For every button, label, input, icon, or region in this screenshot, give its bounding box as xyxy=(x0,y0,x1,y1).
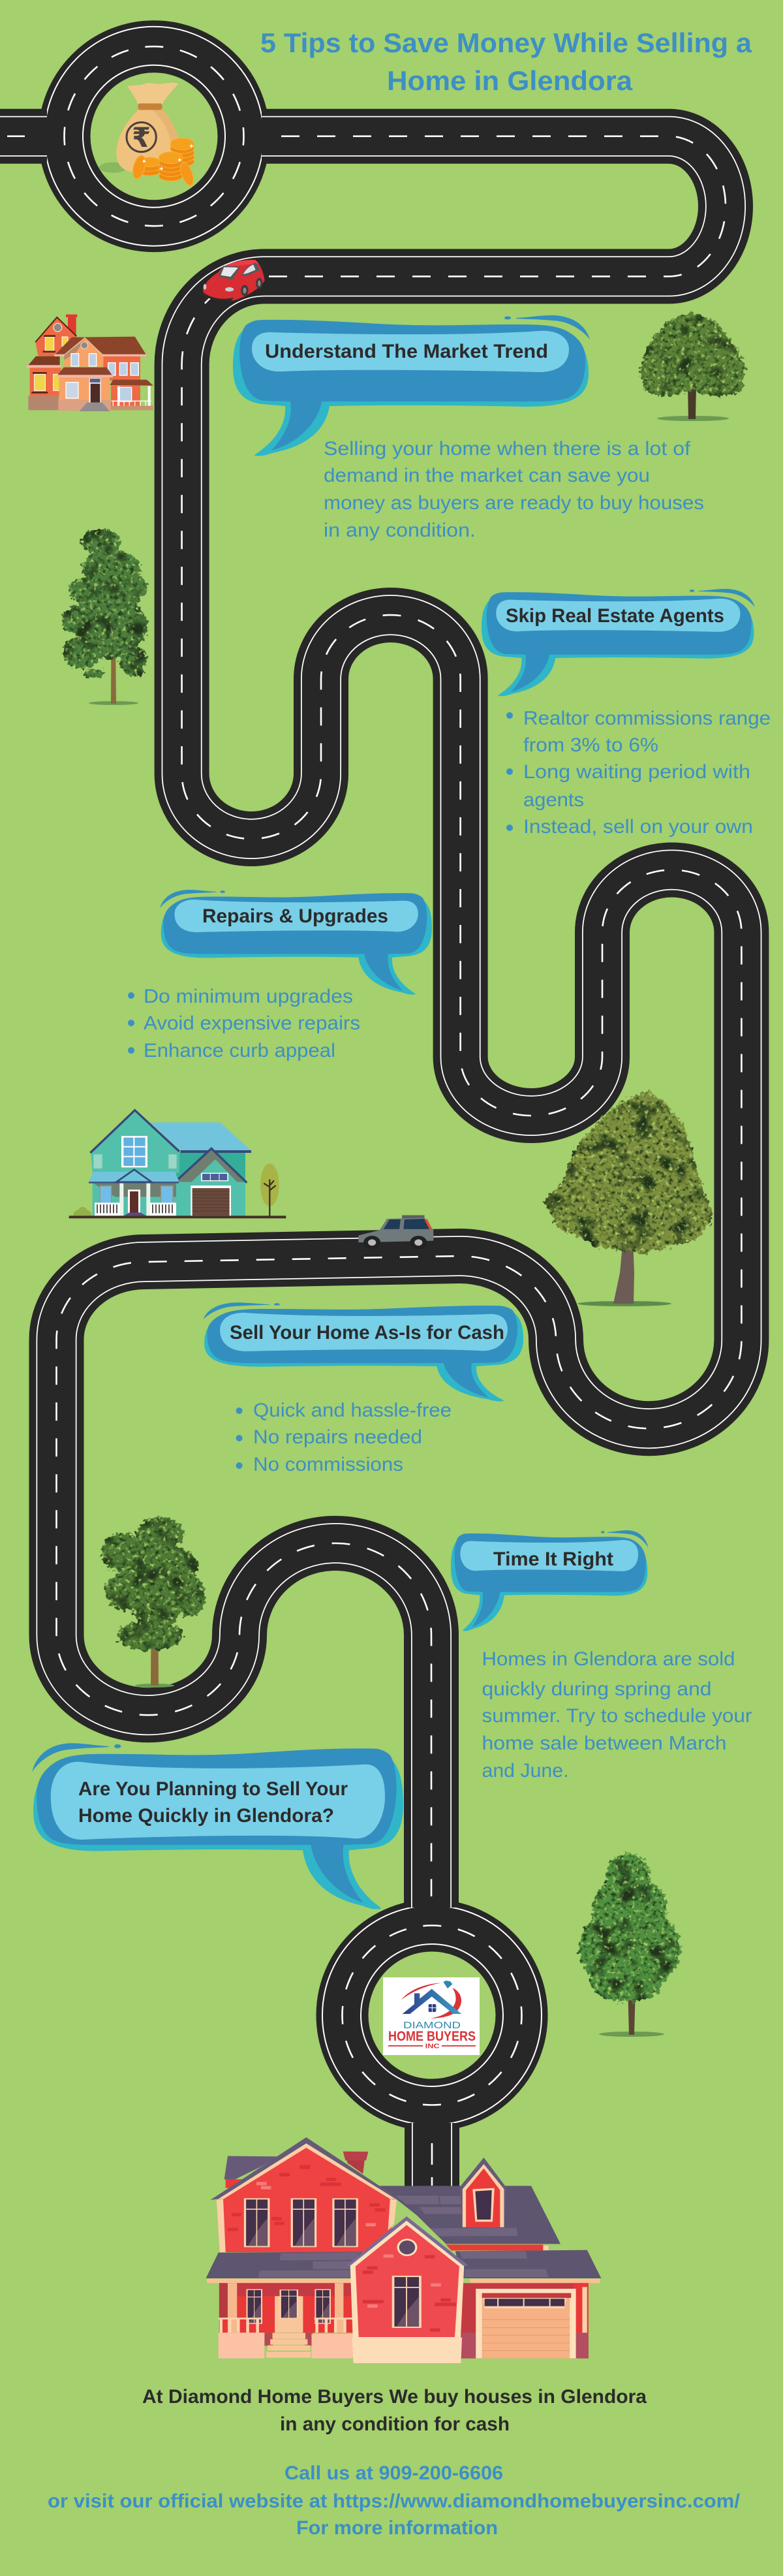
icon: tree near lower bend xyxy=(101,1517,205,1688)
title xyxy=(260,27,752,96)
road: top roundabout xyxy=(0,27,264,246)
heading: Time It Right xyxy=(493,1548,613,1570)
bullet list: agents xyxy=(523,789,584,811)
callout bubble xyxy=(32,1743,403,1909)
text block: demand in the market can save you xyxy=(324,465,650,486)
heading: Sell Your Home As-Is for Cash xyxy=(230,1322,504,1343)
text block: summer. Try to schedule your xyxy=(482,1705,752,1727)
bullet list: Do minimum upgrades xyxy=(144,986,353,1007)
icon: teal house xyxy=(69,1110,286,1218)
footer text: For more information xyxy=(296,2517,498,2539)
logo: Diamond Home Buyers: HOME BUYERS xyxy=(388,2029,476,2044)
bullet list: No commissions xyxy=(253,1454,403,1475)
callout bubble xyxy=(160,890,432,994)
text block: Homes in Glendora are sold xyxy=(482,1648,735,1670)
panel: planning to sell callout xyxy=(32,1743,403,1909)
panel: skip real estate agents xyxy=(482,589,771,838)
bullet list: Avoid expensive repairs xyxy=(144,1013,360,1034)
logo: Diamond Home Buyers xyxy=(383,1977,480,2055)
icon: pine tree left xyxy=(62,529,147,705)
footer text xyxy=(48,2386,741,2539)
callout bubble xyxy=(451,1530,648,1631)
footer text: At Diamond Home Buyers We buy houses in Glendora xyxy=(142,2386,647,2408)
callout bubble xyxy=(482,589,755,696)
icon: tree right of market trend xyxy=(639,312,746,421)
heading: Home Quickly in Glendora? xyxy=(78,1805,334,1827)
panel: understand the market trend xyxy=(233,315,704,541)
text block: home sale between March xyxy=(482,1733,727,1754)
bullet list: Enhance curb appeal xyxy=(144,1040,335,1061)
panel: sell your home as-is for cash xyxy=(203,1302,523,1475)
text block xyxy=(324,438,704,541)
icon: large olive tree xyxy=(544,1090,713,1306)
heading: Are You Planning to Sell Your xyxy=(78,1778,348,1800)
text block: quickly during spring and xyxy=(482,1678,711,1700)
panel: time it right xyxy=(451,1530,752,1782)
text block: in any condition. xyxy=(324,520,476,541)
title: 5 Tips to Save Money While Selling a xyxy=(260,27,752,58)
road: bottom roundabout xyxy=(322,1906,542,2200)
bullet list: Instead, sell on your own xyxy=(523,816,753,838)
icon: money bag with coins: ₹ xyxy=(132,121,151,153)
icon: big red house xyxy=(206,2137,601,2363)
icon: gray car xyxy=(358,1216,433,1249)
icon: tree beside bottom roundabout xyxy=(579,1853,681,2037)
title: Home in Glendora xyxy=(387,65,633,96)
icon: money bag with coins xyxy=(99,83,196,187)
road: winding main road xyxy=(56,136,741,1908)
heading: Repairs & Upgrades xyxy=(202,905,388,927)
panel: repairs and upgrades xyxy=(128,890,432,1061)
text block: money as buyers are ready to buy houses xyxy=(324,492,704,514)
bullet list xyxy=(236,1400,452,1475)
icon: red car xyxy=(203,260,265,301)
logo: Diamond Home Buyers: DIAMOND xyxy=(403,2020,461,2031)
callout bubble xyxy=(233,315,590,456)
bullet list: Quick and hassle-free xyxy=(253,1400,452,1421)
icon: orange house xyxy=(27,315,153,411)
heading xyxy=(78,1778,348,1827)
bullet list xyxy=(506,708,771,838)
bullet list: from 3% to 6% xyxy=(523,734,658,756)
logo: Diamond Home Buyers: INC xyxy=(425,2043,440,2050)
text block: Selling your home when there is a lot of xyxy=(324,438,691,460)
footer text: Call us at 909-200-6606 xyxy=(284,2462,503,2484)
heading: Understand The Market Trend xyxy=(265,341,548,362)
heading: Skip Real Estate Agents xyxy=(506,605,724,627)
bullet list: Long waiting period with xyxy=(523,761,750,783)
text block xyxy=(482,1648,752,1782)
bullet list: No repairs needed xyxy=(253,1426,422,1448)
footer text: in any condition for cash xyxy=(280,2413,510,2435)
callout bubble xyxy=(203,1302,523,1402)
bullet list xyxy=(128,986,360,1061)
bullet list: Realtor commissions range xyxy=(523,708,771,729)
text block: and June. xyxy=(482,1760,569,1782)
footer text: or visit our official website at https://www.diamondhomebuyersinc.com/ xyxy=(48,2490,741,2512)
